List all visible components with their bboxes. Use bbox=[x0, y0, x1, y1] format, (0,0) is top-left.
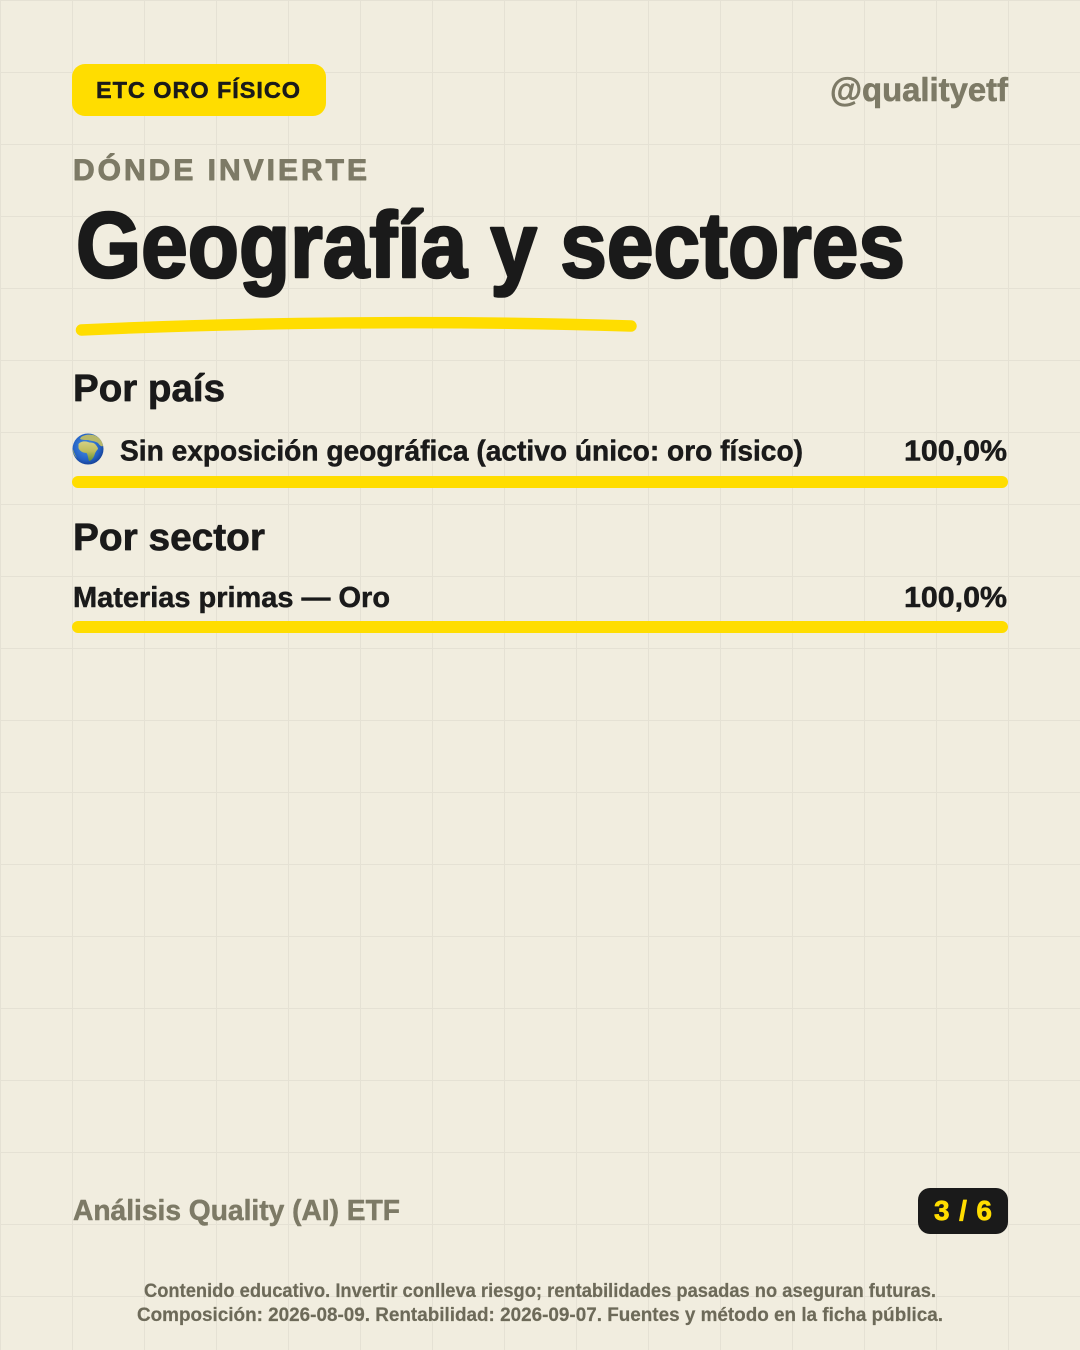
heading: Por sector: Por sector bbox=[73, 517, 265, 559]
handle: @qualityetf bbox=[830, 71, 1009, 108]
icon: globe bbox=[72, 434, 104, 464]
footer label: Análisis Quality (AI) ETF bbox=[73, 1195, 400, 1227]
heading: Por país: Por país bbox=[73, 368, 225, 410]
title underline bbox=[82, 323, 631, 330]
page counter bbox=[918, 1188, 1008, 1234]
title: Geografía y sectores bbox=[76, 193, 905, 297]
page counter: 3 / 6 bbox=[934, 1195, 992, 1226]
disclaimer: Contenido educativo. Invertir conlleva riesgo; rentabilidades pasadas no aseguran futuras. bbox=[144, 1281, 936, 1302]
label: Sin exposición geográfica (activo único: oro físico) bbox=[120, 436, 803, 468]
value: 100,0% bbox=[904, 582, 1007, 614]
badge: ETC ORO FÍSICO bbox=[72, 64, 326, 116]
bar: país 100% bbox=[72, 476, 1008, 488]
disclaimer: Composición: 2026-08-09. Rentabilidad: 2026-09-07. Fuentes y método en la ficha pública. bbox=[137, 1305, 943, 1326]
label: Materias primas — Oro bbox=[73, 582, 390, 614]
row: materias primas bbox=[73, 582, 1007, 614]
row: sin exposición geográfica bbox=[72, 434, 1007, 468]
bar: sector 100% bbox=[72, 621, 1008, 633]
disclaimer bbox=[137, 1281, 943, 1326]
value: 100,0% bbox=[904, 436, 1007, 468]
badge: ETC ORO FÍSICO: ETC ORO FÍSICO bbox=[96, 76, 300, 103]
eyebrow: DÓNDE INVIERTE bbox=[73, 153, 367, 187]
